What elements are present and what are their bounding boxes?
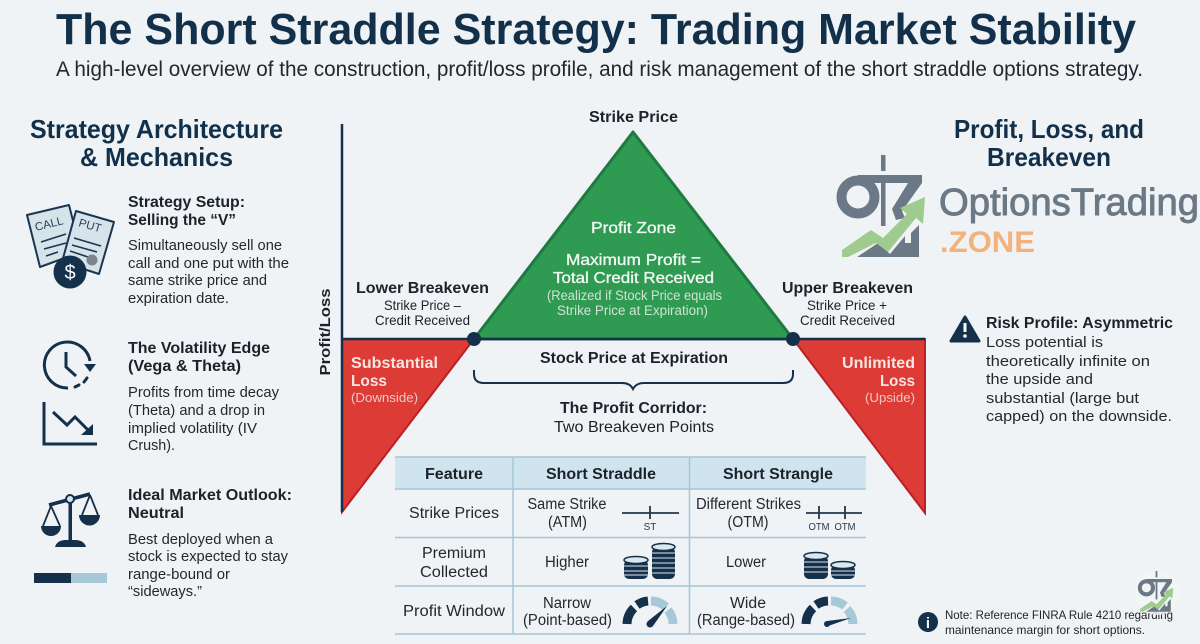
unlimited loss triangle: [793, 339, 925, 513]
icon: call and put contracts: CALL: [34, 215, 65, 234]
row: strike prices: (OTM): [728, 514, 768, 531]
icon: balance scales: [41, 494, 100, 547]
text: volatility edge: implied volatility (IV: [128, 420, 257, 437]
text: risk profile: Loss potential is: [986, 334, 1103, 351]
row: profit window: Wide: [730, 595, 766, 612]
upper breakeven label: [782, 280, 913, 328]
heading: strategy architecture: [30, 114, 283, 172]
x axis label: Stock Price at Expiration: [540, 350, 728, 367]
heading: profit loss and breakeven: [954, 114, 1144, 172]
text: risk profile: substantial (large but: [986, 390, 1140, 407]
icon: clock: [44, 342, 96, 388]
chart: short straddle payoff: [317, 109, 925, 513]
unlimited loss text: Unlimited: [842, 355, 915, 372]
lower breakeven label: Credit Received: [375, 312, 470, 328]
icon: narrow gauge: [627, 601, 673, 628]
table header: Short Straddle: [546, 466, 656, 483]
text: strategy setup: [128, 194, 289, 307]
icon: info: [918, 612, 938, 632]
lower breakeven label: [356, 280, 489, 328]
substantial loss text: Loss: [351, 373, 387, 390]
profit zone text: (Realized if Stock Price equals: [547, 288, 722, 303]
row: strike prices: Different Strikes: [696, 496, 801, 513]
profit corridor label: Two Breakeven Points: [554, 419, 714, 436]
text: risk profile: Risk Profile: Asymmetric: [986, 315, 1173, 332]
subtitle: A high-level overview of the construction, profit/loss profile, and risk management of the short straddle options strategy.: [56, 58, 1143, 81]
strike price label: Strike Price: [589, 109, 678, 126]
icon: call and put contracts: PUT: [77, 217, 103, 235]
icon: call and put contracts: $: [64, 262, 76, 284]
icon: wide gauge: [806, 601, 853, 627]
icon: warning triangle: [951, 317, 979, 341]
text: ideal market outlook: range-bound or: [128, 566, 230, 583]
row: strike prices: OTM: [808, 522, 830, 533]
substantial loss text: [351, 355, 438, 405]
row: strike prices: [409, 496, 862, 533]
row: strike prices: Strike Prices: [409, 505, 499, 522]
profit and loss axis: [341, 124, 343, 512]
icon: short coin stacks: [804, 552, 855, 579]
text: volatility edge: (Theta) and a drop in: [128, 402, 265, 419]
icon: falling volatility chart: [44, 402, 97, 444]
row: premium collected: Collected: [420, 564, 488, 581]
lower breakeven point: [467, 332, 481, 346]
text: volatility edge: [128, 340, 279, 454]
heading: profit loss and breakeven: Profit, Loss, and: [954, 114, 1144, 144]
y axis label: Profit/Loss: [317, 288, 334, 376]
text: note: maintenance margin for short options.: [945, 623, 1145, 637]
text: strategy setup: Selling the “V”: [128, 212, 236, 229]
profit zone text: Maximum Profit =: [566, 252, 701, 269]
text: ideal market outlook: stock is expected to stay: [128, 548, 288, 565]
unlimited loss text: Loss: [880, 373, 915, 390]
text: risk profile: the upside and: [986, 371, 1093, 388]
text: note: [945, 608, 1173, 637]
substantial loss triangle: [342, 339, 474, 512]
row: premium collected: Lower: [726, 554, 766, 571]
row: strike prices: (ATM): [548, 514, 587, 531]
text: ideal market outlook: Neutral: [128, 505, 184, 522]
row: premium collected: [420, 544, 855, 581]
text: strategy setup: same strike price and: [128, 272, 267, 289]
text: strategy setup: call and one put with the: [128, 255, 289, 272]
text: volatility edge: The Volatility Edge: [128, 340, 270, 357]
table header: Feature: [425, 466, 483, 483]
table header: Short Strangle: [723, 466, 833, 483]
text: volatility edge: Crush).: [128, 437, 175, 454]
profit zone text: Profit Zone: [591, 220, 676, 237]
row: profit window: (Range-based): [697, 612, 795, 629]
row: profit window: Profit Window: [403, 603, 506, 620]
text: ideal market outlook: Ideal Market Outlook:: [128, 487, 292, 504]
table: straddle versus strangle: [395, 457, 866, 634]
heading: strategy architecture: Strategy Architecture: [30, 114, 283, 144]
lower breakeven label: Strike Price –: [384, 297, 461, 313]
profit zone text: [547, 220, 722, 318]
profit corridor brace: [474, 370, 793, 389]
text: risk profile: capped) on the downside.: [986, 408, 1172, 425]
logo zone text: .ZONE: [940, 226, 1035, 259]
row: strike prices: ST: [644, 522, 656, 533]
logo mark: [842, 155, 925, 257]
profit zone text: Total Credit Received: [553, 270, 714, 287]
profit corridor label: [554, 400, 714, 436]
row: profit window: [403, 595, 853, 629]
title: The Short Straddle Strategy: Trading Market Stability: [56, 5, 1137, 54]
logo wordmark: OptionsTrading: [939, 182, 1199, 224]
text: risk profile: [986, 315, 1173, 425]
icon: call and put contracts: [27, 205, 114, 288]
text: strategy setup: Simultaneously sell one: [128, 237, 282, 254]
panel: risk profile: [951, 315, 1173, 425]
watermark logo: [1134, 569, 1180, 615]
substantial loss text: Substantial: [351, 355, 438, 372]
profit zone text: Strike Price at Expiration): [557, 303, 708, 318]
upper breakeven label: Credit Received: [800, 312, 895, 328]
text: note: Note: Reference FINRA Rule 4210 regarding: [945, 608, 1173, 622]
profit corridor label: The Profit Corridor:: [560, 400, 707, 417]
row: profit window: (Point-based): [523, 612, 612, 629]
profit zone triangle: [474, 132, 793, 339]
note: finra rule: [918, 608, 1173, 637]
lower breakeven label: Lower Breakeven: [356, 280, 489, 297]
icon: tall coin stacks: [624, 544, 675, 579]
upper breakeven label: Strike Price +: [807, 297, 887, 313]
heading: strategy architecture: & Mechanics: [80, 142, 233, 172]
text: volatility edge: (Vega & Theta): [128, 358, 241, 375]
unlimited loss text: (Upside): [865, 390, 915, 405]
upper breakeven label: Upper Breakeven: [782, 280, 913, 297]
text: risk profile: theoretically infinite on: [986, 353, 1150, 370]
text: volatility edge: Profits from time decay: [128, 384, 279, 401]
row: premium collected: Premium: [422, 545, 486, 562]
heading: profit loss and breakeven: Breakeven: [987, 142, 1111, 172]
text: ideal market outlook: Best deployed when a: [128, 531, 274, 548]
table header: [395, 457, 866, 489]
text: ideal market outlook: [128, 487, 292, 600]
text: ideal market outlook: “sideways.”: [128, 583, 202, 600]
text: strategy setup: Strategy Setup:: [128, 194, 245, 211]
logo: options trading zone: [842, 155, 1199, 259]
text: strategy setup: expiration date.: [128, 290, 229, 307]
row: premium collected: Higher: [545, 554, 589, 571]
row: strike prices: Same Strike: [528, 496, 606, 513]
stock price axis: [342, 338, 925, 340]
substantial loss text: (Downside): [351, 390, 418, 405]
row: strike prices: OTM: [834, 522, 856, 533]
icon: range bar: [34, 573, 107, 583]
panel: strategy architecture and mechanics: [27, 114, 292, 600]
icon: info: i: [926, 615, 930, 632]
unlimited loss text: [842, 355, 915, 405]
row: profit window: Narrow: [543, 595, 592, 612]
upper breakeven point: [786, 332, 800, 346]
